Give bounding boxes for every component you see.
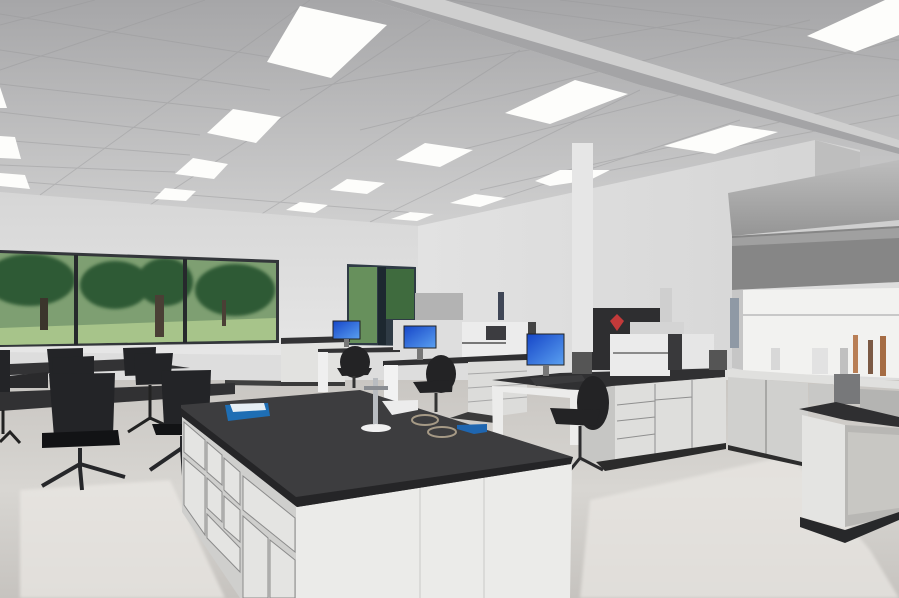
stool: middle: [413, 355, 456, 412]
white tray: [382, 400, 418, 415]
floor: [0, 380, 899, 598]
chair: front left: [42, 373, 125, 490]
fume hood: [728, 160, 899, 378]
island worktop: [181, 390, 573, 507]
analyser instrument: [572, 288, 727, 376]
support column: [572, 143, 593, 352]
back benches and instruments: [318, 292, 536, 423]
floor reflections: [20, 455, 899, 598]
duct: [815, 140, 860, 178]
monitor: back: [333, 321, 360, 347]
hood counter and cabinets: [728, 369, 899, 466]
monitor: front: [527, 334, 586, 386]
back left counter: [225, 336, 350, 386]
right back wall: [418, 140, 860, 370]
monitor: middle: [404, 326, 436, 360]
central island: [181, 390, 573, 598]
lab stools: [337, 346, 609, 480]
chair: front right: [150, 370, 211, 476]
blue box on island: [225, 403, 270, 421]
stool: front: [550, 376, 609, 480]
stool: back: [337, 346, 372, 388]
dark storage cabinet: [590, 308, 660, 370]
pipette stand: [361, 378, 391, 432]
petri dishes: [412, 415, 456, 437]
left back wall: [0, 192, 418, 355]
ceiling beam: [372, 0, 899, 154]
blue notepad: [457, 424, 487, 434]
right island: [799, 402, 899, 543]
ceiling light panels: [0, 0, 899, 221]
conference chairs: [0, 347, 211, 490]
front bench: [492, 368, 726, 471]
conference table: [0, 359, 235, 411]
large window: [0, 250, 280, 350]
small window: [347, 264, 416, 346]
chair: back left: [47, 348, 94, 392]
chair: far left: [0, 350, 20, 443]
island drawers: [184, 422, 295, 598]
chair: back centre: [123, 347, 173, 432]
window view: [0, 250, 280, 350]
ceiling: [0, 0, 899, 240]
island left side: [182, 415, 296, 598]
island front: [296, 461, 572, 598]
